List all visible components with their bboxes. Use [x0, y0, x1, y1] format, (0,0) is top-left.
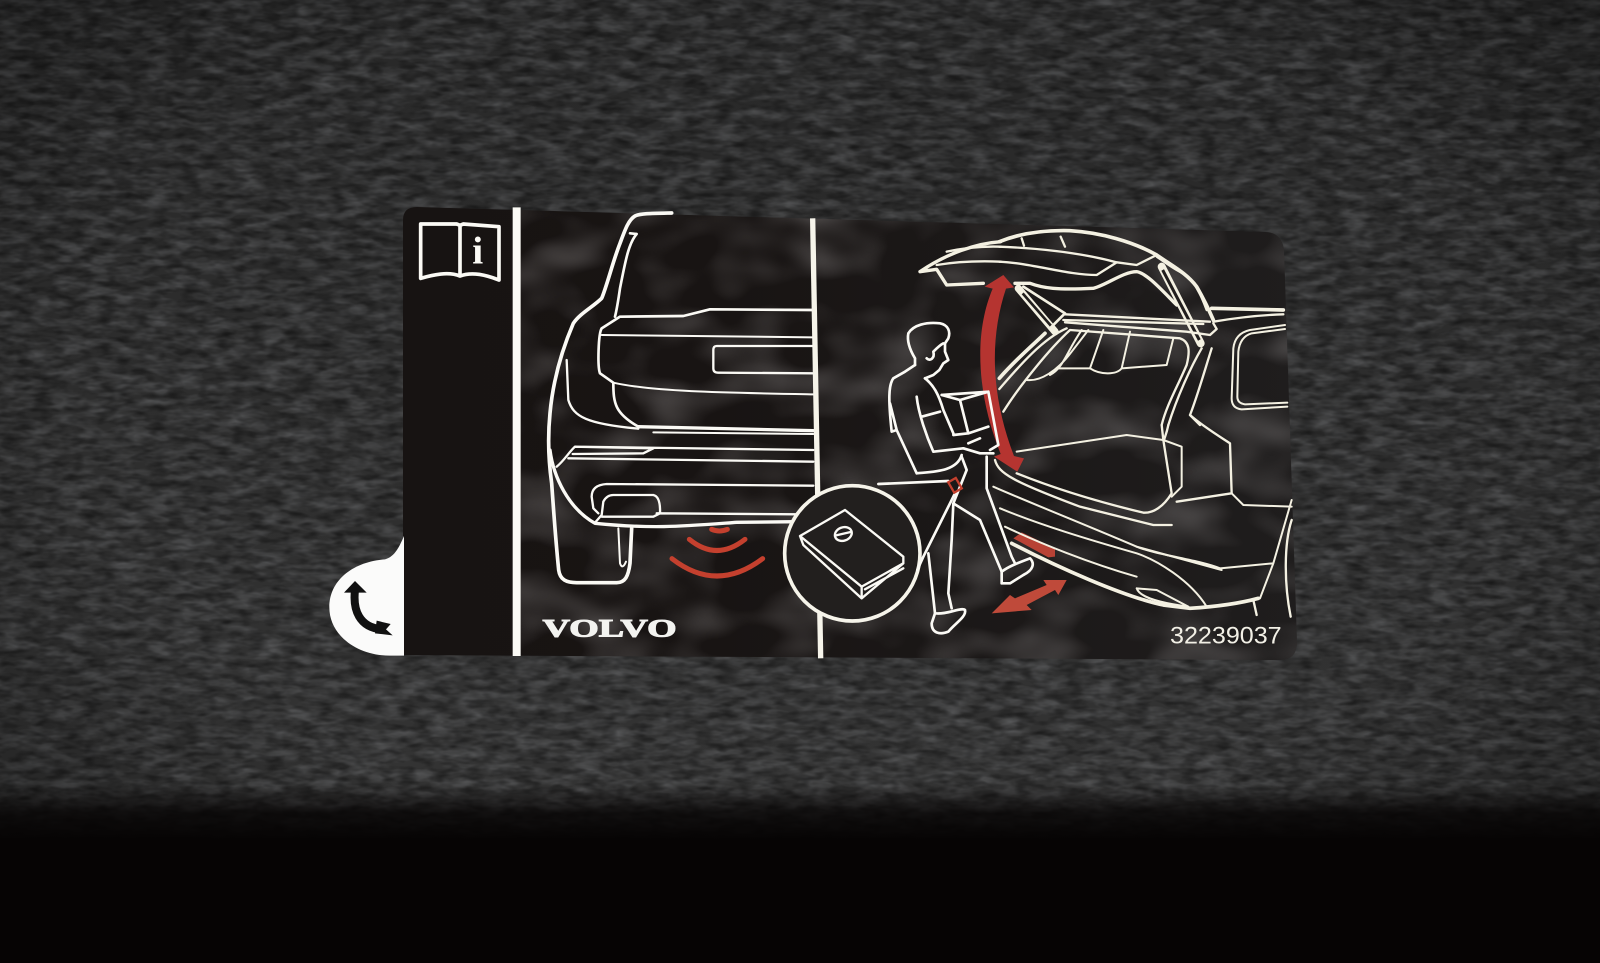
- arrow: red foot motion: [992, 580, 1067, 613]
- car: rear body outline: [549, 213, 813, 583]
- man: legs and shoes: [928, 457, 1015, 613]
- figure: man carrying box: [878, 323, 1033, 633]
- arrow: red tailgate motion: [980, 275, 1024, 472]
- panel: sticker label: [403, 200, 1310, 670]
- divider: left: [505, 207, 529, 656]
- man: torso and arm: [889, 365, 963, 473]
- car: open tailgate and cargo window area: [999, 231, 1287, 425]
- icon: peel arrow: [344, 581, 393, 635]
- tab: white peel corner with arrow: [329, 536, 404, 656]
- shoe: front: [1002, 558, 1033, 583]
- callout: magnified key fob circle: [785, 486, 920, 621]
- panel: left rear view of car: [421, 207, 813, 656]
- logo: Volvo wordmark: VOLVO: [543, 615, 677, 643]
- icon: info book: [421, 224, 499, 280]
- icon: red sensor waves: [672, 529, 763, 576]
- box held by man: [942, 392, 998, 453]
- shoe: back: [932, 609, 965, 633]
- panel: right tailgate opening scene: [785, 218, 1292, 658]
- icon: info book: i: [472, 228, 483, 272]
- car: open tailgate left end and lower body: [920, 242, 1292, 617]
- icon: red key in pocket: [948, 478, 962, 493]
- line: callout from key pocket to magnifier: [878, 481, 955, 570]
- icon: key fob: [800, 510, 903, 598]
- divider: right: [813, 218, 821, 658]
- part number: 32239037: [1170, 622, 1282, 649]
- man: head and hair: [908, 323, 949, 378]
- icon: red kick zone under bumper: [1013, 532, 1055, 557]
